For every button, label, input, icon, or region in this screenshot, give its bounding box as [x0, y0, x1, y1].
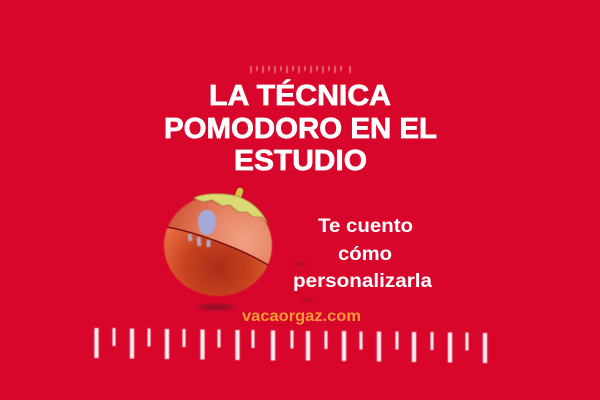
- small ruler decoration: [251, 66, 350, 73]
- subtitle: personalizarla: [293, 271, 432, 292]
- tomato body: [164, 195, 272, 296]
- title: [164, 78, 437, 177]
- timer ticks: [190, 234, 208, 247]
- subtitle: Te cuento: [318, 216, 413, 237]
- infographic canvas: [94, 65, 488, 364]
- tomato stem: [237, 191, 240, 199]
- title: ESTUDIO: [234, 145, 367, 177]
- subtitle: [293, 216, 432, 292]
- website link: vacaorgaz.com: [242, 308, 361, 325]
- faint shadow streaks: [294, 263, 313, 301]
- large ruler decoration: [96, 328, 485, 363]
- subtitle: cómo: [338, 244, 392, 265]
- tomato shadow: [189, 301, 243, 313]
- timer knob: [198, 210, 216, 235]
- timer seam: [167, 227, 268, 265]
- icon: tomato timer: [164, 191, 272, 313]
- tomato leaves: [193, 194, 268, 225]
- title: POMODORO EN EL: [164, 113, 437, 145]
- title: LA TÉCNICA: [209, 78, 391, 112]
